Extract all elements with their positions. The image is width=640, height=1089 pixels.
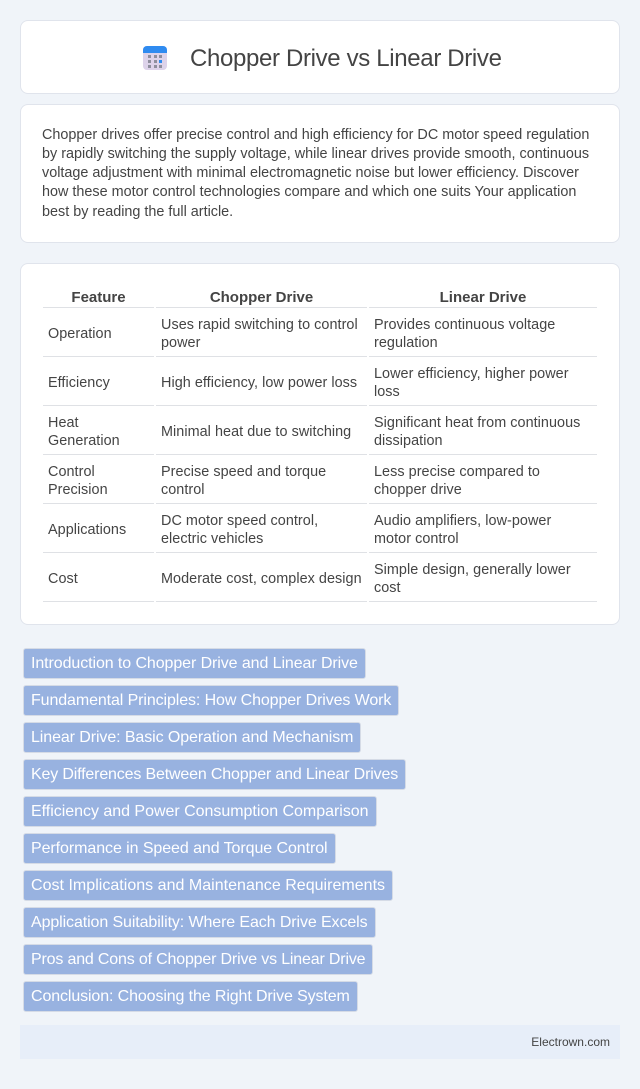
comparison table: power: [161, 335, 200, 351]
comparison table: dissipation: [374, 433, 443, 449]
comparison table: Moderate cost, complex design: [161, 571, 362, 587]
comparison table: Heat: [48, 415, 79, 431]
intro text: [42, 127, 589, 220]
comparison table: Audio amplifiers, low-power: [374, 513, 551, 529]
table of contents links: Performance in Speed and Torque Control: [31, 840, 328, 857]
table of contents links: Key Differences Between Chopper and Linear Drives: [31, 766, 398, 783]
comparison table: electric vehicles: [161, 531, 263, 547]
comparison table: Precision: [48, 482, 108, 498]
footer: Electrown.com: [531, 1035, 610, 1049]
table of contents links: Introduction to Chopper Drive and Linear Drive: [31, 655, 358, 672]
table card: [20, 263, 620, 625]
comparison table: Applications: [48, 522, 126, 538]
comparison table: Linear Drive: [440, 289, 526, 306]
comparison table: Cost: [48, 571, 78, 587]
comparison table: chopper drive: [374, 482, 462, 498]
comparison table: Minimal heat due to switching: [161, 424, 351, 440]
comparison table: Uses rapid switching to control: [161, 317, 358, 333]
comparison table: Significant heat from continuous: [374, 415, 580, 431]
intro card: [20, 104, 620, 243]
title: Chopper Drive vs Linear Drive: [190, 45, 502, 72]
comparison table: Feature: [71, 289, 126, 306]
intro text: how these motor control technologies compare and which one suits Your application: [42, 184, 576, 200]
comparison table: control: [161, 482, 205, 498]
comparison table: Control: [48, 464, 95, 480]
comparison table: Less precise compared to: [374, 464, 540, 480]
comparison table: Precise speed and torque: [161, 464, 326, 480]
intro text: by rapidly switching the supply voltage, while linear drives provide smooth, continuous: [42, 146, 589, 162]
comparison table: regulation: [374, 335, 438, 351]
comparison table: Provides continuous voltage: [374, 317, 555, 333]
comparison table: Simple design, generally lower: [374, 562, 571, 578]
comparison table: Lower efficiency, higher power: [374, 366, 569, 382]
table of contents links: Cost Implications and Maintenance Requirements: [31, 877, 385, 894]
table of contents links: Linear Drive: Basic Operation and Mechanism: [31, 729, 353, 746]
intro text: voltage adjustment with minimal electromagnetic noise but lower efficiency. Discover: [42, 165, 579, 181]
comparison table: Efficiency: [48, 375, 110, 391]
table of contents links: Efficiency and Power Consumption Comparison: [31, 803, 369, 820]
comparison table: Chopper Drive: [210, 289, 313, 306]
comparison table: High efficiency, low power loss: [161, 375, 357, 391]
intro text: Chopper drives offer precise control and high efficiency for DC motor speed regulation: [42, 127, 589, 143]
header card: [20, 20, 620, 94]
comparison table: motor control: [374, 531, 459, 547]
icon: calendar: [143, 46, 167, 70]
comparison table: Operation: [48, 326, 112, 342]
comparison table: loss: [374, 384, 400, 400]
table of contents links: Pros and Cons of Chopper Drive vs Linear Drive: [31, 951, 365, 968]
table of contents links: Application Suitability: Where Each Drive Excels: [31, 914, 368, 931]
table of contents links: [23, 648, 406, 1012]
comparison table: Generation: [48, 433, 120, 449]
comparison table: DC motor speed control,: [161, 513, 318, 529]
footer: [20, 1025, 620, 1059]
comparison table: cost: [374, 580, 401, 596]
intro text: best by reading the full article.: [42, 204, 233, 220]
comparison table: [43, 289, 597, 602]
table of contents links: Conclusion: Choosing the Right Drive System: [31, 988, 350, 1005]
table of contents links: Fundamental Principles: How Chopper Drives Work: [31, 692, 391, 709]
